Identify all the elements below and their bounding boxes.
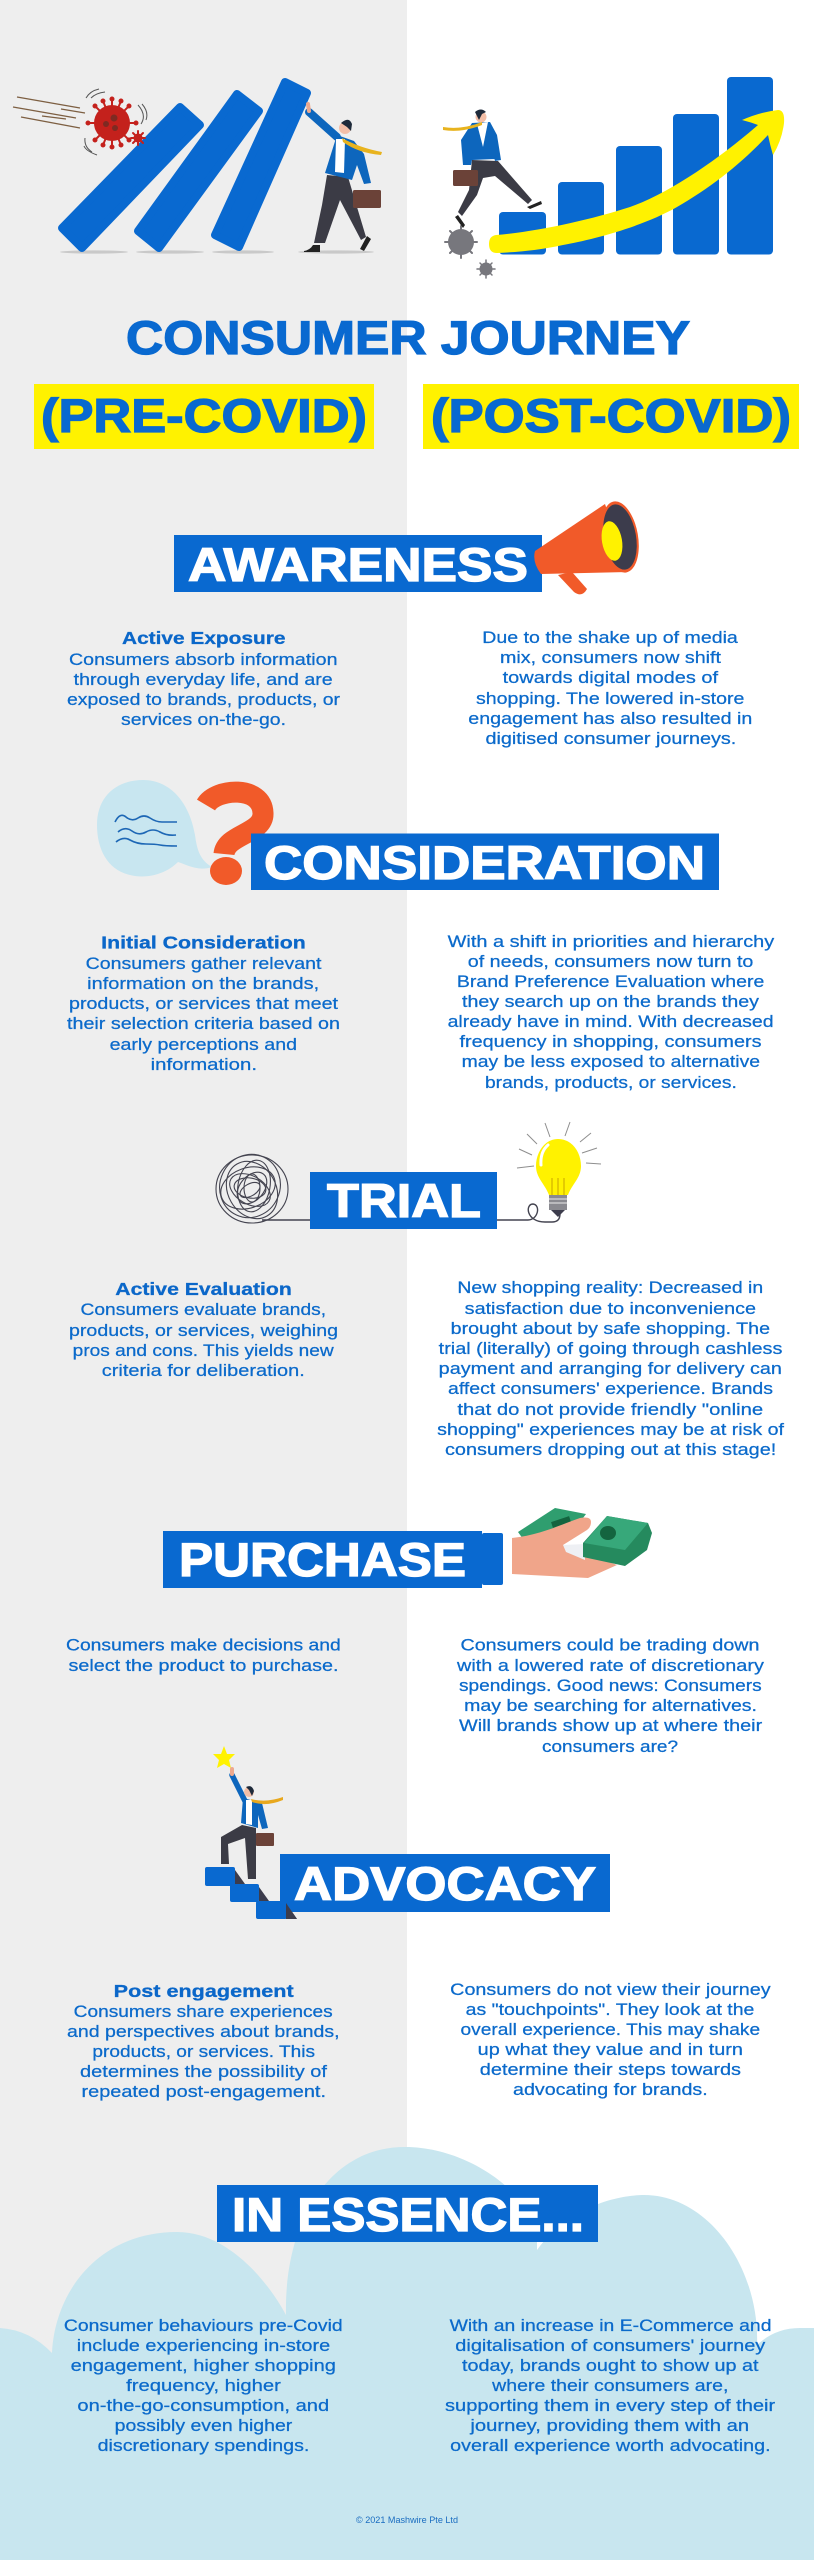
text: purchase post-covid: Consumers could be trading down (460, 1636, 760, 1654)
text: consideration pre-covid: information on the brands, (87, 975, 319, 993)
text: advocacy pre-covid: Post engagement (114, 1981, 294, 2001)
text: trial post-covid: payment and arranging for delivery can (439, 1360, 782, 1378)
text: essence post-covid: overall experience worth advocating. (450, 2437, 771, 2455)
text: essence pre-covid: frequency, higher (126, 2377, 282, 2395)
text: essence post-covid (445, 2317, 776, 2455)
heading: trial (310, 1172, 497, 1229)
heading: advocacy: ADVOCACY (294, 1857, 596, 1910)
icon: hand holding money (512, 1508, 652, 1578)
raised arm (309, 112, 337, 137)
text: advocacy post-covid: overall experience. This may shake (460, 2021, 760, 2039)
heading: advocacy (280, 1854, 610, 1919)
icon: megaphone (534, 498, 644, 594)
legs (458, 160, 532, 216)
text: purchase pre-covid: select the product to purchase. (68, 1657, 338, 1675)
text: advocacy pre-covid: repeated post-engagement. (82, 2083, 326, 2101)
text: trial post-covid: shopping" experiences may be at risk of (437, 1421, 784, 1439)
text: trial post-covid: New shopping reality: Decreased in (457, 1279, 763, 1297)
text: purchase post-covid: spendings. Good news: Consumers (459, 1677, 762, 1695)
jacket (461, 122, 501, 165)
label: post-covid: (POST-COVID) (431, 389, 791, 442)
text: consideration pre-covid: products, or services that meet (69, 995, 338, 1013)
text: consideration pre-covid: early perceptions and (110, 1036, 297, 1054)
illustration: falling dominoes held by businessman (13, 82, 382, 254)
text: essence pre-covid: include experiencing in-store (77, 2337, 330, 2355)
text: awareness post-covid: mix, consumers now shift (500, 649, 721, 667)
left pre-covid background panel (0, 0, 407, 2560)
text: essence post-covid: today, brands ought to show up at (462, 2357, 759, 2375)
text: essence post-covid: With an increase in E-Commerce and (450, 2317, 772, 2335)
text: awareness pre-covid: exposed to brands, products, or (67, 691, 341, 709)
text: purchase pre-covid (66, 1636, 341, 1675)
text: awareness post-covid: Due to the shake up of media (482, 629, 739, 647)
text: essence pre-covid (64, 2317, 343, 2455)
text: essence pre-covid: engagement, higher shopping (71, 2357, 336, 2375)
text: awareness post-covid: towards digital modes of (503, 669, 719, 687)
illustration: rising bars with businessman and arrow (443, 77, 784, 278)
text: essence pre-covid: Consumer behaviours pre-Covid (64, 2317, 343, 2335)
icon: tangled scribble (209, 1144, 310, 1228)
text: advocacy post-covid: advocating for brands. (513, 2081, 708, 2099)
text: trial post-covid: consumers dropping out at this stage! (445, 1441, 776, 1459)
text: consideration post-covid: already have in mind. With decreased (448, 1013, 774, 1031)
text: essence pre-covid: discretionary spendings. (98, 2437, 309, 2455)
text: advocacy pre-covid (67, 1981, 340, 2101)
text: awareness post-covid: engagement has also resulted in (468, 710, 752, 728)
text: awareness pre-covid: through everyday life, and are (74, 671, 333, 689)
cloud background (0, 2147, 814, 2560)
text: consideration post-covid: they search up on the brands they (462, 993, 760, 1011)
icon: speech bubble with question mark (97, 780, 263, 885)
title: CONSUMER JOURNEY (126, 311, 690, 364)
text: trial pre-covid: Consumers evaluate brands, (80, 1301, 326, 1319)
text: trial post-covid (437, 1279, 784, 1459)
text: awareness post-covid: shopping. The lowered in-store (476, 690, 744, 708)
text: trial pre-covid: pros and cons. This yields new (73, 1342, 334, 1360)
legs (314, 175, 366, 243)
heading: purchase: PURCHASE (179, 1533, 466, 1586)
text: trial post-covid: satisfaction due to inconvenience (465, 1300, 756, 1318)
text: consideration post-covid: of needs, consumers now turn to (468, 953, 753, 971)
heading: trial: TRIAL (327, 1174, 481, 1227)
text: consideration post-covid (448, 933, 775, 1092)
text: consideration post-covid: brands, products, or services. (485, 1074, 737, 1092)
text: consideration post-covid: Brand Preference Evaluation where (457, 973, 764, 991)
text: advocacy pre-covid: products, or services. This (92, 2043, 315, 2061)
text: awareness pre-covid (67, 628, 341, 729)
icon: businessman climbing steps to a star (205, 1746, 297, 1919)
text: purchase post-covid: Will brands show up at where their (459, 1717, 763, 1735)
text: essence pre-covid: on-the-go-consumption, and (77, 2397, 329, 2415)
text: trial pre-covid (69, 1279, 338, 1380)
text: purchase post-covid: consumers are? (542, 1738, 678, 1756)
label: pre-covid: (PRE-COVID) (41, 389, 367, 442)
text: consideration post-covid: frequency in shopping, consumers (460, 1033, 762, 1051)
text: awareness pre-covid: services on-the-go. (121, 711, 286, 729)
text: essence post-covid: journey, providing them with an (469, 2417, 749, 2435)
text: advocacy post-covid: as "touchpoints". They look at the (466, 2001, 754, 2019)
text: awareness pre-covid: Consumers absorb information (69, 651, 338, 669)
text: trial post-covid: that do not provide friendly "online (457, 1401, 763, 1419)
text: trial pre-covid: criteria for deliberation. (102, 1362, 305, 1380)
text: trial post-covid: brought about by safe shopping. The (451, 1320, 770, 1338)
text: advocacy pre-covid: determines the possibility of (80, 2063, 327, 2081)
text: trial pre-covid: products, or services, weighing (69, 1322, 338, 1340)
text: essence post-covid: digitalisation of consumers' journey (455, 2337, 766, 2355)
text: essence post-covid: supporting them in every step of their (445, 2397, 776, 2415)
text: consideration pre-covid: Initial Consideration (101, 932, 306, 952)
text: trial pre-covid: Active Evaluation (115, 1279, 292, 1299)
label: post-covid (423, 384, 799, 449)
text: purchase post-covid: with a lowered rate of discretionary (456, 1657, 765, 1675)
text: advocacy pre-covid: Consumers share experiences (74, 2003, 333, 2021)
text: advocacy post-covid: up what they value and in turn (478, 2041, 743, 2059)
text: purchase post-covid (456, 1636, 765, 1756)
text: advocacy pre-covid: and perspectives about brands, (67, 2023, 340, 2041)
text: essence pre-covid: possibly even higher (115, 2417, 293, 2435)
heading: consideration: CONSIDERATION (264, 836, 705, 889)
text: advocacy post-covid: Consumers do not view their journey (450, 1981, 771, 1999)
text: purchase post-covid: may be searching for alternatives. (464, 1697, 757, 1715)
text: awareness post-covid: digitised consumer journeys. (486, 730, 736, 748)
text: consideration pre-covid: their selection criteria based on (67, 1015, 340, 1033)
icon: light bulb (497, 1122, 601, 1222)
heading: awareness: AWARENESS (188, 538, 528, 591)
text: trial post-covid: trial (literally) of going through cashless (439, 1340, 782, 1358)
text: advocacy post-covid (450, 1981, 771, 2099)
heading: in essence: IN ESSENCE... (232, 2188, 584, 2241)
text: trial post-covid: affect consumers' experience. Brands (448, 1380, 773, 1398)
text: consideration pre-covid: information. (151, 1056, 257, 1074)
text: advocacy post-covid: determine their steps towards (480, 2061, 741, 2079)
text: consideration post-covid: may be less exposed to alternative (462, 1053, 760, 1071)
text: purchase pre-covid: Consumers make decisions and (66, 1636, 341, 1654)
text: awareness pre-covid: Active Exposure (122, 628, 286, 648)
text: consideration pre-covid: Consumers gather relevant (86, 955, 322, 973)
text: consideration post-covid: With a shift in priorities and hierarchy (448, 933, 775, 951)
text: awareness post-covid (468, 629, 752, 748)
text: essence post-covid: where their consumers are, (491, 2377, 728, 2395)
jacket and arm (325, 135, 371, 184)
footer copyright: © 2021 Mashwire Pte Ltd (356, 2515, 458, 2526)
text: consideration pre-covid (67, 932, 340, 1074)
